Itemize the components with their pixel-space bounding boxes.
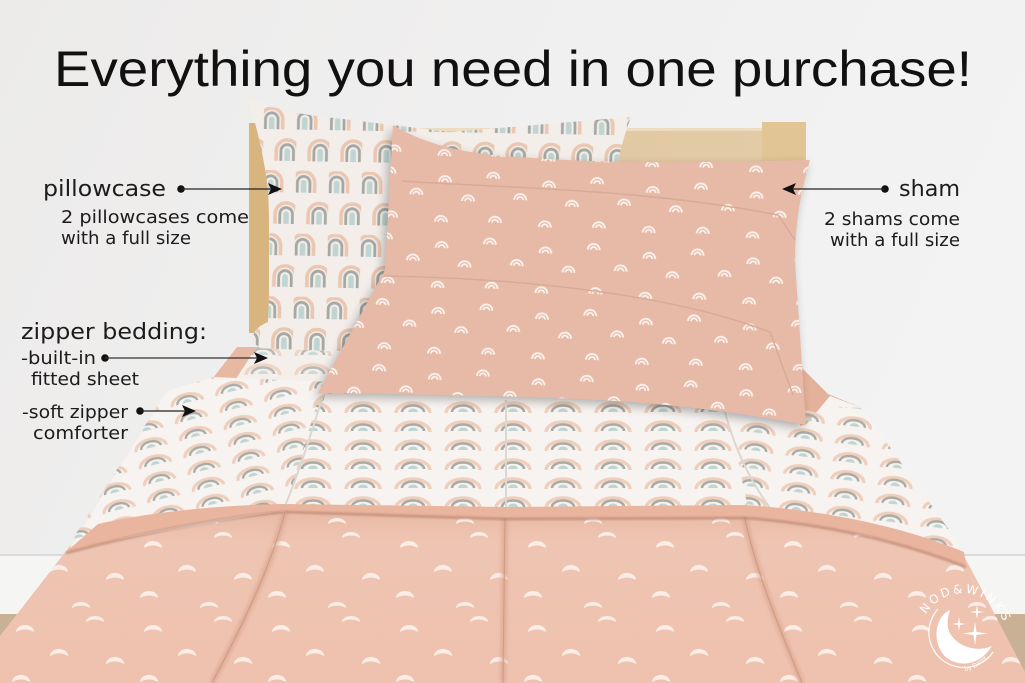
- baseboard and floor: [0, 554, 1025, 683]
- label: sham: [824, 177, 960, 251]
- label: sham: with a full size: [830, 230, 960, 251]
- label: pillowcase: with a full size: [61, 228, 191, 249]
- arrow: pillowcase: [177, 183, 282, 195]
- headboard: [249, 122, 806, 333]
- label: pillowcase: pillowcase: [43, 177, 166, 202]
- stars: [952, 605, 988, 645]
- fold seams: [285, 396, 770, 508]
- label: zipper bedding: zipper bedding:: [21, 320, 207, 345]
- label: zipper bedding: fitted sheet: [31, 369, 139, 390]
- folded comforter top: [60, 370, 970, 567]
- arrow: sham: [782, 183, 889, 195]
- label: sham: sham: [899, 177, 960, 202]
- label: zipper bedding: comforter: [33, 423, 129, 444]
- right salmon edge: [796, 362, 862, 426]
- arrow: fitted sheet: [101, 352, 268, 364]
- logo: Nod & Winks: [920, 584, 1011, 672]
- label: pillowcase: [43, 177, 249, 249]
- sham seams: [384, 181, 795, 395]
- comforter seams: [212, 512, 802, 683]
- label: zipper bedding: [21, 320, 207, 444]
- label: sham: 2 shams come: [824, 209, 960, 230]
- label: zipper bedding: -soft zipper: [22, 402, 129, 423]
- fitted sheet: [213, 347, 862, 426]
- logo wordmark: NOD&WINKS: [920, 584, 1011, 620]
- logo tagline: by Daisy: [964, 656, 986, 672]
- fold band: [66, 504, 966, 566]
- arrow: zipper comforter: [136, 405, 196, 417]
- moon: [936, 610, 992, 664]
- pillowcase: [248, 98, 631, 353]
- bottom comforter: [0, 505, 1025, 683]
- title: Everything you need in one purchase!: [54, 41, 972, 97]
- sham: [315, 125, 810, 429]
- label: zipper bedding: -built-in: [21, 348, 96, 369]
- label: pillowcase: 2 pillowcases come: [61, 207, 249, 228]
